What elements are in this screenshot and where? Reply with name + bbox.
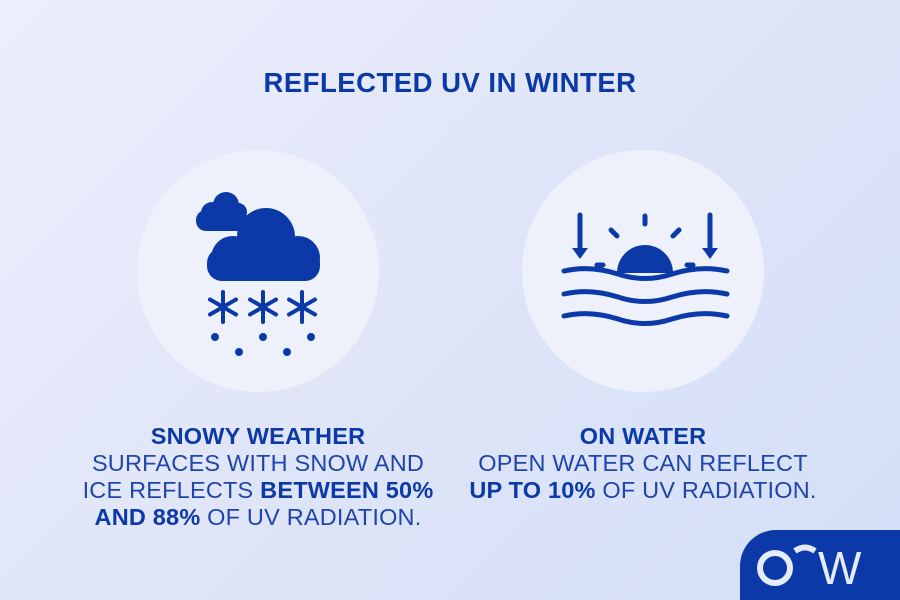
icon: snowflakes and dots [210,292,315,356]
icon: clouds [196,192,320,281]
icon: sun [617,245,673,273]
text: on water: UP TO 10% OF UV RADIATION. [469,477,817,503]
text: on water [469,423,817,503]
text: snowy weather: AND 88% OF UV RADIATION. [95,504,421,530]
text: snowy weather: ICE REFLECTS BETWEEN 50% [83,477,433,503]
icon: arrows [578,215,582,250]
logo: W [818,542,862,594]
text: snowy weather: SURFACES WITH SNOW AND [92,450,424,476]
title: REFLECTED UV IN WINTER [263,67,637,98]
logo [740,530,900,600]
icon: waves [564,269,727,324]
text: snowy weather [83,423,433,530]
text: on water: ON WATER [580,423,706,449]
text: snowy weather: SNOWY WEATHER [151,423,365,449]
text: on water: OPEN WATER CAN REFLECT [478,450,808,476]
